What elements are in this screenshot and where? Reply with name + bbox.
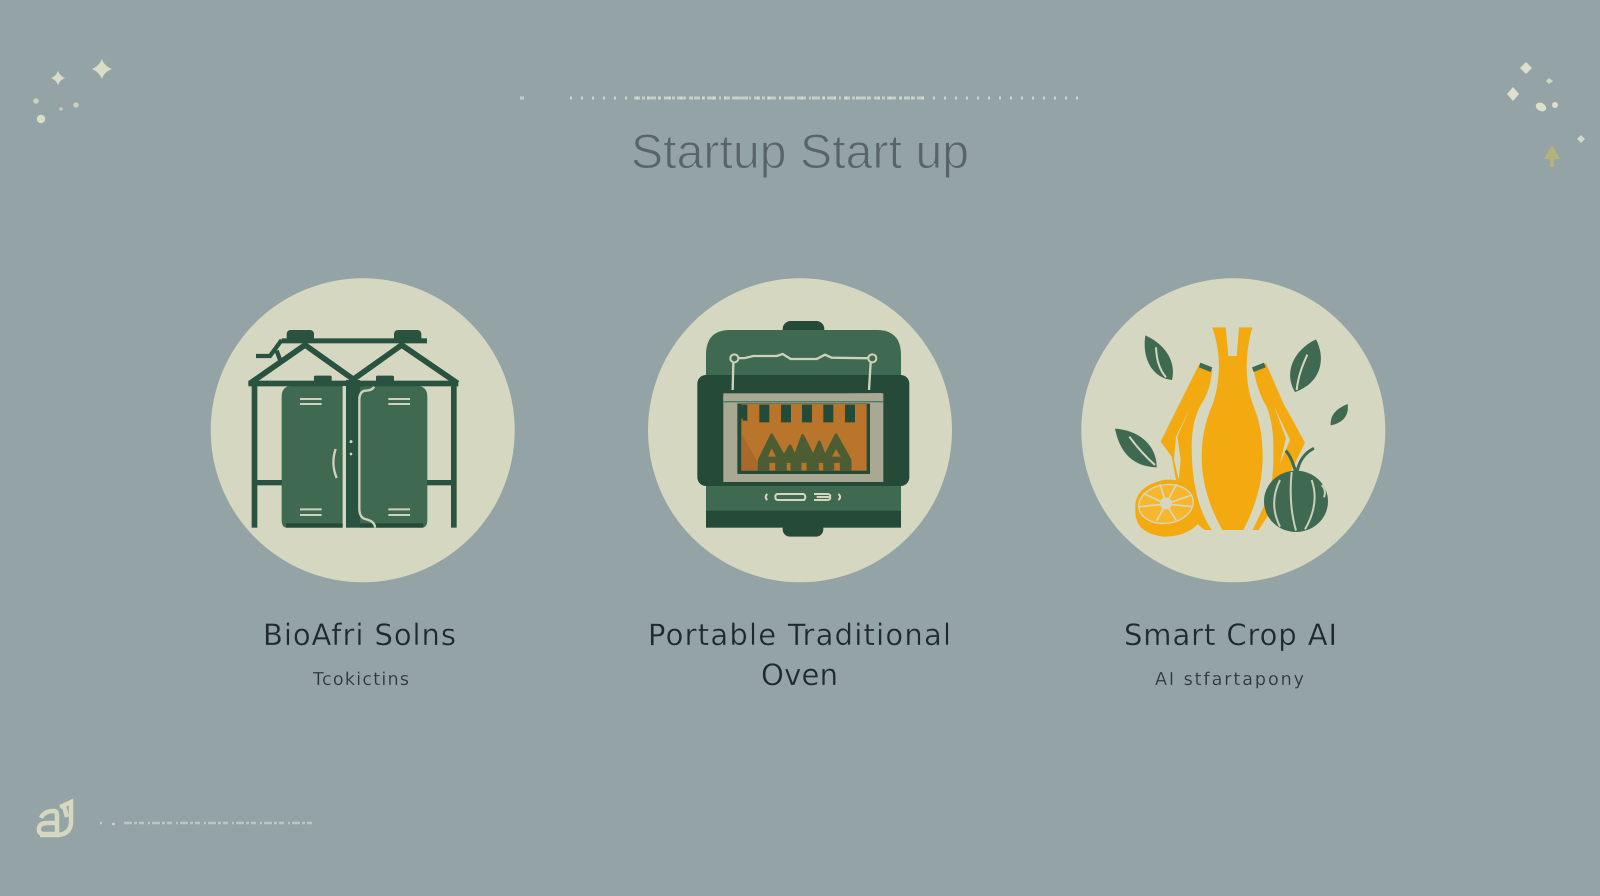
panel: BioAfri Solns <box>211 278 515 690</box>
sublabel: AI stfartapony: AI stfartapony <box>1155 670 1304 690</box>
circle background 2 <box>648 278 952 582</box>
title: Startup Start up <box>631 126 969 179</box>
decorative garbled strip above title <box>520 96 1082 100</box>
icon: small yellow tree arrow <box>1544 145 1560 167</box>
panel: Portable Traditional Oven <box>648 278 952 692</box>
circle background 1 <box>211 278 515 582</box>
icon: produce and bottles <box>1115 327 1348 537</box>
circle background 3 <box>1081 278 1385 582</box>
decorative garbled footer strip <box>100 823 312 824</box>
icon: oven <box>697 321 909 537</box>
label: BioAfri Solns: BioAfri Solns <box>263 618 456 652</box>
label: Portable Traditional Oven: Oven <box>761 658 838 692</box>
label: Smart Crop AI: Smart Crop AI <box>1124 618 1337 652</box>
sublabel: Tcokictins: Tcokictins <box>312 670 409 690</box>
label: Portable Traditional Oven: Portable Traditional <box>648 618 951 652</box>
panel: Smart Crop AI <box>1081 278 1385 690</box>
decorative sparkles top left <box>33 59 112 123</box>
icon: twin silos <box>248 330 458 528</box>
logo bottom left <box>39 802 71 835</box>
decorative sparkles top right <box>1507 62 1585 143</box>
